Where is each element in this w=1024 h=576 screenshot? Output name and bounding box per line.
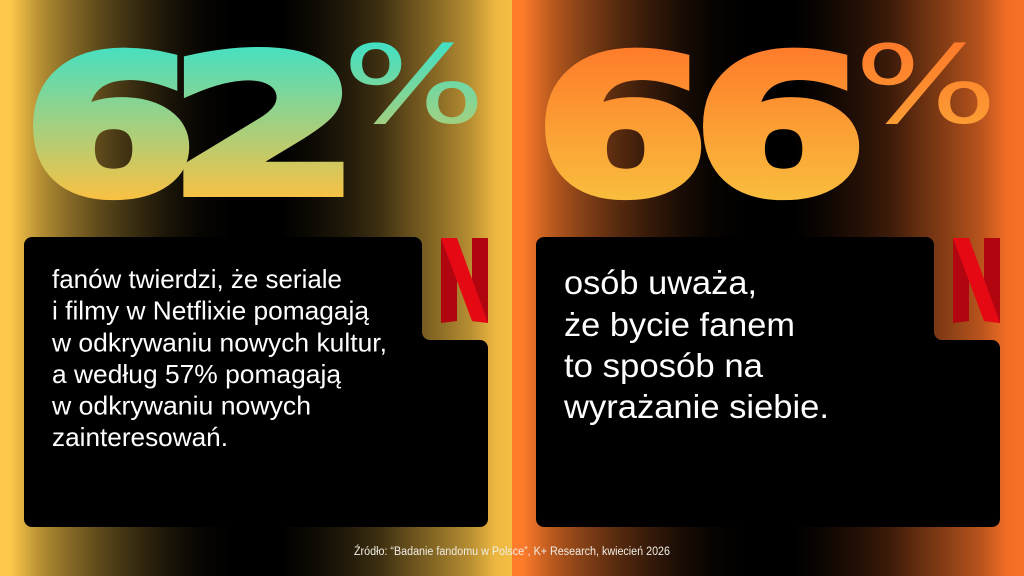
icon: Netflix logo right — [953, 238, 1000, 323]
left background panel — [0, 0, 512, 576]
icon: Netflix logo left — [441, 238, 488, 323]
text block: right description: wyrażanie siebie. — [563, 388, 829, 425]
panel: right text card — [536, 237, 1000, 527]
right background panel — [512, 0, 1024, 576]
panel: left text card — [24, 237, 488, 527]
text block: right description: to sposób na — [564, 347, 764, 384]
statistic: 62%: % — [342, 22, 486, 148]
statistic: 66% — [536, 17, 998, 238]
statistic: 66%: 6 — [536, 17, 709, 238]
text block: right description: osób uważa, — [564, 264, 757, 301]
text block: left description: w odkrywaniu nowych kultur, — [51, 328, 387, 358]
text block: left description: w odkrywaniu nowych — [51, 390, 311, 420]
text block: left description: fanów twierdzi, że seriale — [52, 264, 342, 294]
text block: left description: i filmy w Netflixie pomagają — [52, 296, 370, 326]
statistic: 62% — [24, 17, 486, 238]
source note: Źródło: “Badanie fandomu w Polsce”, K+ Research, kwiecień 2026 — [354, 545, 670, 558]
statistic: 62%: 6 — [24, 17, 197, 238]
statistic: 66%: % — [854, 22, 998, 148]
text block: left description: a według 57% pomagają — [52, 359, 342, 389]
text block: left description: zainteresowań. — [52, 422, 228, 452]
text block: right description: że bycie fanem — [564, 306, 795, 343]
text block: right description — [563, 264, 829, 425]
statistic: 62%: 2 — [168, 17, 361, 238]
text block: left description — [51, 264, 387, 452]
statistic: 66%: 6 — [694, 17, 867, 238]
